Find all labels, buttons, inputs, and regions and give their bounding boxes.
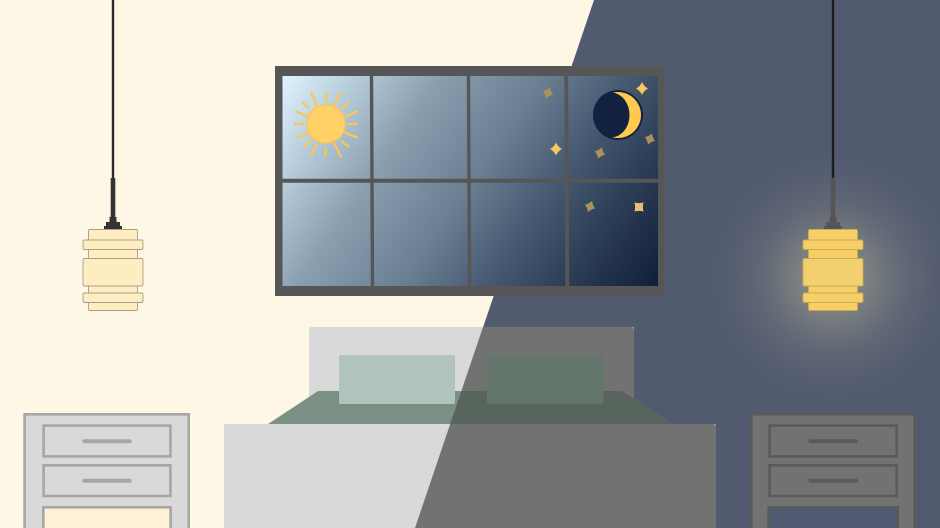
- lamp cap: [824, 178, 842, 229]
- lamp glow: [708, 153, 940, 403]
- bed base: [224, 424, 716, 528]
- bed night shade: [415, 327, 716, 528]
- bed blanket: [268, 391, 672, 424]
- icon: stars: [541, 82, 657, 216]
- icon: moon: [592, 90, 643, 140]
- pillow right: [487, 355, 604, 404]
- left nightstand: [25, 414, 189, 528]
- right nightstand: [751, 414, 915, 528]
- night wall: [415, 0, 940, 528]
- drawer: [770, 465, 897, 496]
- lamp cord: [832, 0, 834, 180]
- drawer: [44, 426, 170, 456]
- lamp shade: [83, 230, 143, 310]
- drawer: [770, 426, 897, 456]
- lamp cap: [104, 178, 122, 229]
- lamp shade: [803, 230, 863, 310]
- bed: [224, 327, 716, 528]
- open shelf: [769, 507, 898, 528]
- drawer: [44, 465, 170, 496]
- icon: sun: [294, 92, 358, 157]
- pillow left: [339, 355, 455, 404]
- window glass: [282, 76, 658, 286]
- bed headboard: [309, 327, 634, 437]
- left lamp: [83, 0, 143, 310]
- window mullions: [282, 76, 658, 286]
- lamp cord: [112, 0, 114, 180]
- open shelf: [43, 507, 171, 528]
- right lamp: [803, 0, 863, 310]
- window: [275, 66, 665, 296]
